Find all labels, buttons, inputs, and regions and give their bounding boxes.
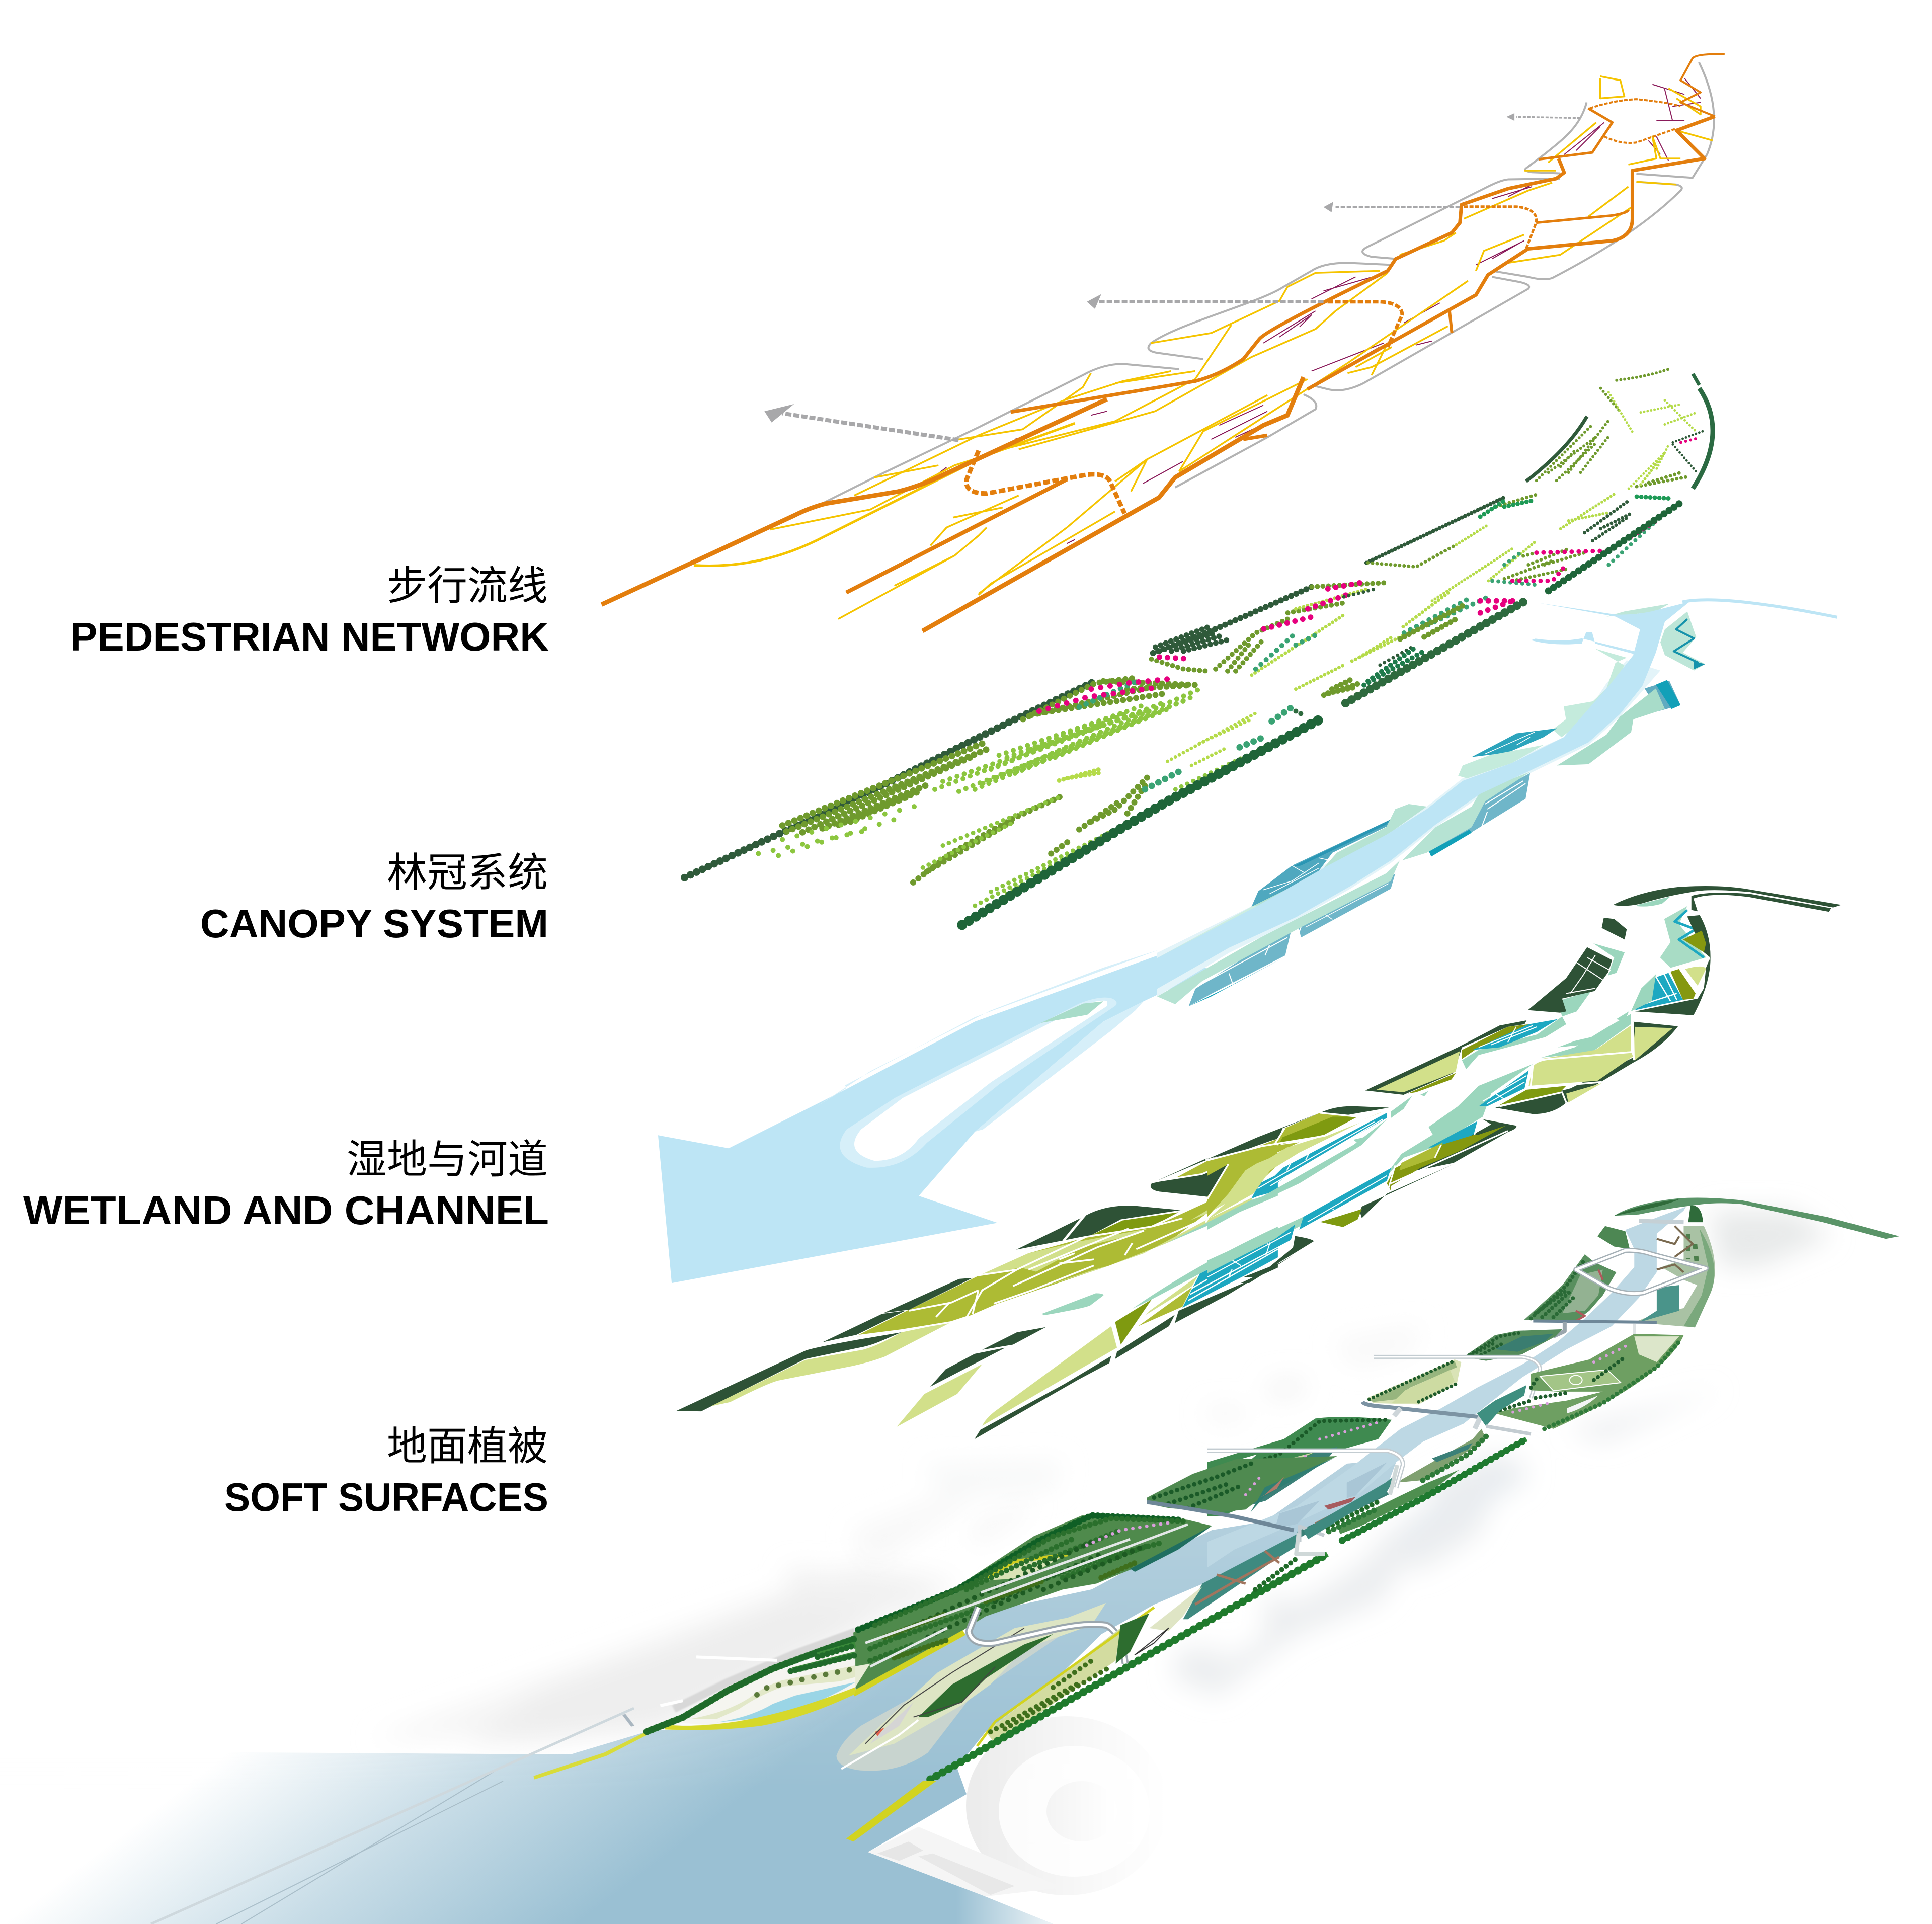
mint wetland bands [1553, 649, 1627, 737]
tree strip along lower bank [962, 717, 1324, 925]
purple secondary trails [938, 78, 1701, 543]
yellow secondary paths [694, 76, 1713, 619]
river-crossing bridge [969, 1608, 1125, 1664]
label: wetland and channel: 湿地与河道 [347, 1137, 548, 1182]
straight bridges [1533, 1321, 1657, 1322]
diamond bridge [1576, 1250, 1706, 1294]
left dark parcel [1558, 943, 1625, 1016]
long mint river ribbon [1208, 1064, 1533, 1273]
river upper [1208, 1207, 1686, 1567]
islets [1042, 1293, 1103, 1315]
lower right wetland [1133, 1227, 1278, 1309]
small island [1601, 918, 1627, 939]
right mid parcel [1633, 681, 1680, 718]
upper-mid parcel [1365, 1020, 1526, 1095]
left tip: shore, lagoon and yellow tail [533, 1639, 855, 1780]
shoreline tree belt [647, 1639, 855, 1732]
lower parcels [1299, 873, 1395, 937]
soccer centre circle [1570, 1376, 1582, 1385]
label: canopy system: CANOPY SYSTEM [200, 901, 548, 946]
right terraces [1396, 1429, 1486, 1483]
halo on outer bank [816, 950, 1159, 1107]
arrow: fourth [1506, 113, 1580, 121]
canopy section D [1526, 369, 1713, 489]
small tower in the shallows [622, 1714, 634, 1727]
lower-left wetland parcels [676, 1132, 1278, 1439]
layer: pedestrian network [602, 54, 1725, 631]
river crossing bridge [1362, 1402, 1482, 1417]
label: pedestrian network: PEDESTRIAN NETWORK [70, 614, 549, 659]
label: canopy system: 林冠系统 [387, 850, 548, 895]
mid-left parcel [1320, 1106, 1389, 1115]
river bridge [1147, 1502, 1294, 1530]
far-right thin branch [1682, 600, 1837, 617]
canopy section B [1152, 583, 1527, 703]
city base: pale blurred buildings to the right and upper left [851, 1211, 1832, 1696]
pier [868, 1827, 1063, 1896]
right strip of park trees [930, 1554, 1327, 1779]
lower section of the plan [837, 1456, 1397, 1841]
upper left strip [1524, 1254, 1617, 1321]
left lower park [853, 1514, 1212, 1694]
upper right park [1634, 1226, 1715, 1327]
main channel [1157, 602, 1689, 989]
layer: channel water [658, 600, 1837, 1283]
arrow: far left [764, 404, 958, 440]
label: canopy system [200, 850, 548, 946]
causeway lines in the bay [151, 1708, 634, 1924]
canopy section C [1366, 452, 1689, 601]
cream beach [676, 1649, 855, 1726]
label: pedestrian network [70, 564, 549, 659]
road marks on pale land [660, 1657, 777, 1706]
top arc, upper parks and bridges [1208, 1197, 1899, 1542]
label: soft surfaces [224, 1424, 548, 1519]
light parcel [1367, 1359, 1461, 1404]
left upper parcel [1472, 728, 1557, 757]
label: wetland and channel [23, 1137, 549, 1233]
soccer park [1495, 1334, 1683, 1429]
terraces [1183, 1533, 1299, 1619]
bay and river water [46, 1462, 1396, 1924]
beach [853, 1664, 870, 1691]
white path network [821, 1154, 1244, 1343]
lower river and big arrow [658, 600, 1837, 1283]
big left parcels [1252, 820, 1391, 907]
yellow tail [533, 1727, 664, 1780]
left bridge lower [1208, 1451, 1403, 1488]
layer: soft surfaces aerial plan [0, 1197, 1899, 1924]
upper wetland parcels [1208, 886, 1841, 1283]
crescent [1613, 886, 1841, 908]
terraced wetland near bridge [1477, 1385, 1526, 1426]
orange main walkways [602, 54, 1725, 631]
label: wetland and channel: WETLAND AND CHANNEL [23, 1188, 549, 1233]
teal parcels of the ribbon [1479, 1071, 1528, 1106]
layer: canopy system [685, 369, 1713, 925]
right lower parcel [1495, 1022, 1678, 1114]
mid-left parcel [1464, 1329, 1562, 1361]
dashed orange crossings [967, 99, 1680, 514]
upper lower park [1147, 1456, 1337, 1512]
lower right tree strip [1338, 1470, 1459, 1534]
upper channel mint [1660, 906, 1706, 968]
label: soft surfaces: 地面植被 [387, 1424, 548, 1469]
peninsula rings [966, 1716, 1167, 1895]
lagoon [716, 1682, 855, 1722]
upper bridge to the left [1374, 1357, 1540, 1398]
upper left island [1597, 1226, 1630, 1249]
island [837, 1634, 1063, 1771]
yellow shore [665, 1687, 855, 1730]
right parcels [1429, 773, 1530, 855]
yellow pier [846, 1781, 937, 1841]
lower park upper part [1208, 1417, 1392, 1516]
grey site outlines [822, 62, 1714, 504]
lower mid-right olive parcel [1391, 1119, 1516, 1186]
arrow: third [1324, 202, 1460, 212]
arrow: second [1087, 294, 1324, 309]
city base: pale blurred land at the left shore [370, 1499, 1035, 1742]
river island [840, 998, 1116, 1168]
band base [853, 1142, 1278, 1337]
canopy section A [685, 678, 1320, 906]
layer: wetland and channel [676, 886, 1841, 1439]
upper river with wetland edges [1157, 602, 1705, 1006]
label: soft surfaces: SOFT SURFACES [224, 1475, 548, 1519]
right band [1635, 915, 1711, 1015]
promontory with trees [986, 1628, 1120, 1744]
grey jagged shadow above the shoreline trees [674, 1632, 855, 1709]
label: pedestrian network: 步行流线 [387, 564, 548, 608]
pale halo [1157, 660, 1660, 997]
